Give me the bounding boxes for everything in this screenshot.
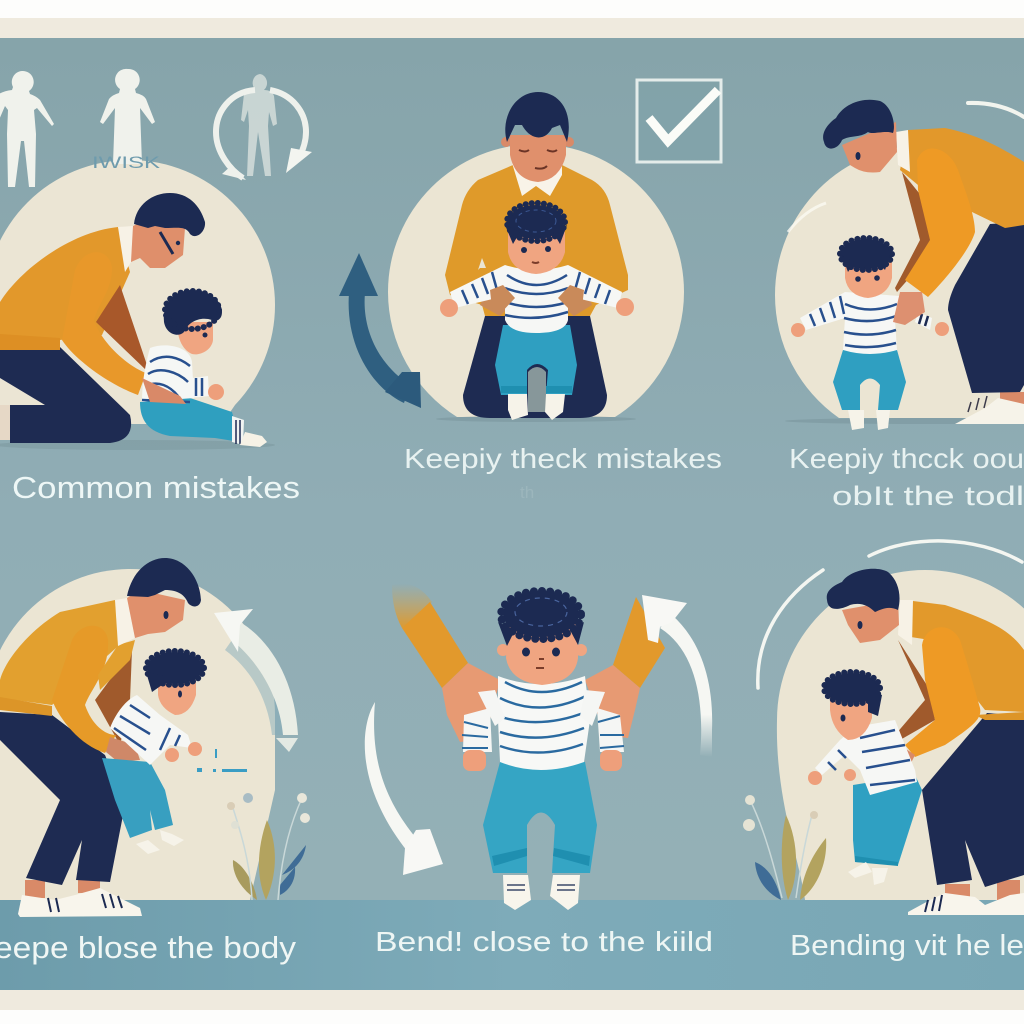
toddler front [440, 203, 634, 420]
caption: Keepiy thcck oou [789, 443, 1024, 474]
backdrop circle [0, 160, 275, 424]
arrow: white up [642, 595, 712, 757]
arrow: left curve [758, 570, 823, 688]
label: twist: IWISK [92, 153, 161, 172]
caption ghost: th [520, 483, 534, 502]
toddler leaning [102, 651, 204, 854]
panel: bending with the legs [743, 541, 1024, 962]
arrow: top curve [968, 103, 1024, 117]
icon: posture figures [0, 69, 277, 187]
toddler leaning [808, 672, 922, 885]
floor shadow [436, 416, 636, 422]
backdrop circle [388, 144, 684, 417]
man bending [827, 569, 1024, 915]
caption: Keepiy theck mistakes [404, 443, 722, 474]
decorative plant [743, 795, 826, 900]
panel: keep back straight [339, 80, 722, 502]
panel: bend close to the kid [365, 583, 713, 957]
caption: Bend! close to the kiild [375, 926, 713, 957]
backdrop circle [775, 145, 1024, 418]
backdrop circle [0, 569, 275, 900]
decorative plant [227, 793, 310, 900]
left sleeve arm [392, 583, 500, 742]
bottom band [0, 900, 1024, 990]
floor shadow [785, 418, 1024, 424]
arrow: white down [365, 702, 443, 875]
panel: top right [775, 100, 1024, 511]
right sleeve arm [585, 597, 665, 738]
caption: Common mistakes [12, 470, 300, 505]
caption: Bending vit he le [790, 930, 1024, 962]
man facing front [445, 92, 628, 418]
arrow: curved blue [339, 253, 421, 408]
backdrop circle [777, 570, 1024, 900]
panel: common mistakes [0, 69, 312, 505]
man bending [823, 100, 1024, 424]
man kneeling [0, 193, 205, 443]
toddler sitting [140, 290, 267, 447]
small floating marks [197, 749, 247, 772]
toddler large [462, 591, 624, 910]
icon: rotation arrows [216, 90, 312, 180]
arrow: top curve [869, 541, 1022, 562]
icon: check box [637, 80, 721, 162]
panel: keep close to body [0, 558, 310, 965]
man bending [0, 558, 201, 917]
caption line two: obIt the todl [832, 481, 1024, 511]
floor shadow [0, 440, 275, 450]
disc highlight [788, 203, 826, 232]
toddler standing [791, 238, 949, 430]
caption: eepe blose the body [0, 930, 297, 965]
arrow: curved white [214, 609, 298, 752]
